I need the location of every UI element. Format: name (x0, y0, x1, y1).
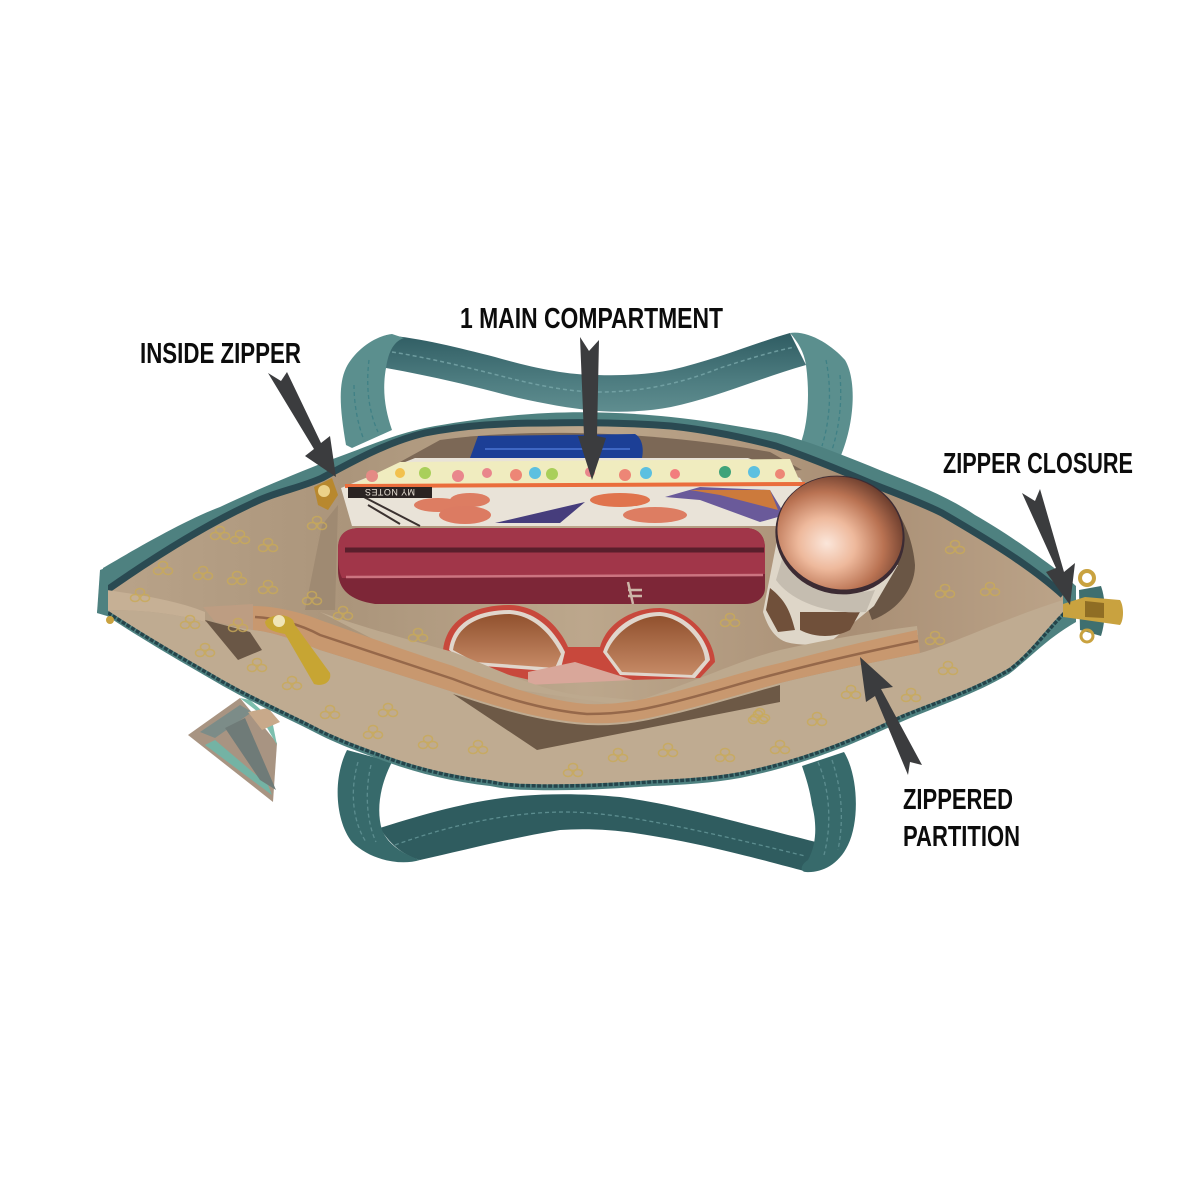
label: zippered partition: PARTITION (903, 821, 1020, 853)
arrow: inside zipper (268, 372, 336, 477)
arrow: zipper closure (1022, 489, 1075, 605)
zipper strip (253, 606, 920, 723)
flap behind zipper (320, 612, 918, 710)
gold monogram on partition end (926, 632, 944, 644)
floral spine (366, 466, 785, 482)
label: zippered partition: ZIPPERED (903, 784, 1013, 816)
label: zipper closure: ZIPPER CLOSURE (943, 448, 1133, 480)
zippered partition (107, 600, 1063, 784)
top handle (341, 333, 853, 458)
flowers and bird (414, 498, 462, 512)
rear shadow behind items (350, 433, 802, 495)
label: inside zipper: INSIDE ZIPPER (140, 338, 301, 370)
zipper tape (107, 423, 1063, 595)
hanging tag (188, 698, 280, 802)
bottom handle (338, 750, 856, 872)
label: zippered partition (903, 784, 1020, 853)
arrow: zippered partition (860, 657, 922, 775)
gold inside zipper slider (314, 478, 338, 510)
label: 1 main compartment: 1 MAIN COMPARTMENT (460, 303, 723, 335)
bottle (762, 461, 918, 645)
my notes label (348, 487, 432, 498)
lining (107, 423, 1063, 784)
front lining (107, 600, 1063, 784)
notebook (341, 458, 806, 526)
zipper pull (265, 615, 330, 685)
arrow: main compartment (578, 337, 606, 480)
left pocket cloth (203, 604, 253, 630)
bag body (97, 412, 1076, 790)
tip fold (107, 590, 205, 622)
gold zipper hardware (97, 567, 1123, 642)
outer teal rim (97, 412, 1076, 790)
sunglasses (443, 605, 715, 685)
dark pocket opening (453, 685, 780, 750)
phone (470, 434, 643, 458)
wallet (338, 528, 765, 604)
lining monogram pattern (130, 516, 1000, 776)
notebook: MY NOTES (365, 487, 415, 497)
